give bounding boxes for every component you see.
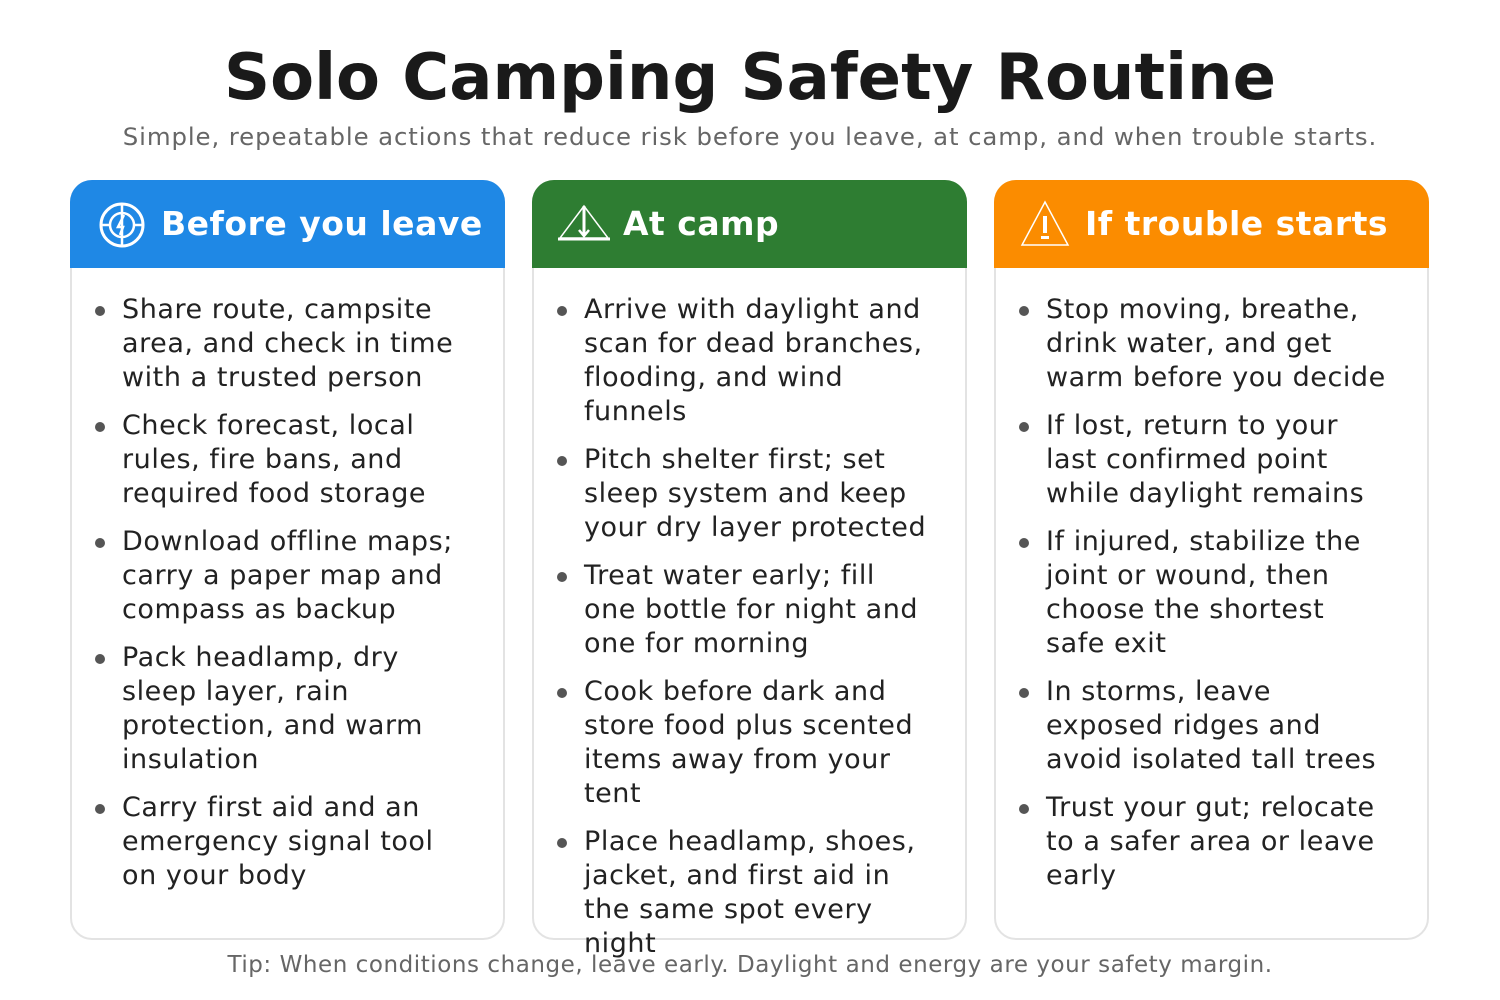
list: before you leave: required food storage [122,478,426,509]
list: before you leave: area, and check in time [122,328,453,359]
list: before you leave: protection, and warm [122,710,423,741]
list: before you leave: emergency signal tool [122,826,434,857]
list: at camp: store food plus scented [584,710,913,741]
tip footer: Tip: When conditions change, leave early. Daylight and energy are your safety margin. [227,952,1273,978]
list: if trouble starts: early [1046,860,1116,891]
panel: if trouble starts [994,180,1429,940]
list: at camp: Treat water early; fill [584,560,875,591]
list: at camp: one bottle for night and [584,594,918,625]
icon: warning [1020,200,1070,246]
list: before you leave: carry a paper map and [122,560,443,591]
list: before you leave: insulation [122,744,259,775]
list: if trouble starts: joint or wound, then [1046,560,1330,591]
list: at camp: jacket, and first aid in [584,860,890,891]
list: if trouble starts: exposed ridges and [1046,710,1321,741]
title: Solo Camping Safety Routine [224,41,1276,115]
list: if trouble starts: while daylight remains [1046,478,1364,509]
list: at camp: sleep system and keep [584,478,907,509]
list: before you leave: rules, fire bans, and [122,444,403,475]
list: if trouble starts: to a safer area or leave [1046,826,1375,857]
list: before you leave: sleep layer, rain [122,676,349,707]
list: at camp: the same spot every [584,894,873,925]
list: if trouble starts: If injured, stabilize the [1046,526,1361,557]
list: at camp [557,294,926,959]
header: before you leave [70,180,505,268]
list: if trouble starts: safe exit [1046,628,1166,659]
list: before you leave: Carry first aid and an [122,792,420,823]
list: before you leave: Share route, campsite [122,294,432,325]
list: at camp: items away from your [584,744,891,775]
list: at camp: scan for dead branches, [584,328,923,359]
list: at camp: Arrive with daylight and [584,294,921,325]
list: at camp: funnels [584,396,687,427]
list: at camp: Pitch shelter first; set [584,444,885,475]
list: if trouble starts: drink water, and get [1046,328,1332,359]
list: at camp: night [584,928,656,959]
list: if trouble starts: last confirmed point [1046,444,1328,475]
list: at camp: tent [584,778,641,809]
list: before you leave: compass as backup [122,594,396,625]
list: if trouble starts: warm before you decide [1046,362,1386,393]
subtitle: Simple, repeatable actions that reduce risk before you leave, at camp, and when trouble starts. [123,122,1377,151]
icon: compass [100,202,144,248]
icon: tent [558,204,610,240]
list: at camp: your dry layer protected [584,512,926,543]
header: before you leave: Before you leave [161,204,483,243]
list: if trouble starts: avoid isolated tall trees [1046,744,1376,775]
list: before you leave: Pack headlamp, dry [122,642,399,673]
panel: at camp [532,180,967,940]
header: if trouble starts [994,180,1429,268]
list: at camp: flooding, and wind [584,362,843,393]
list: before you leave: on your body [122,860,307,891]
header: at camp: At camp [623,204,779,243]
header: at camp [532,180,967,268]
list: before you leave: with a trusted person [122,362,423,393]
list: if trouble starts: choose the shortest [1046,594,1324,625]
list: at camp: Place headlamp, shoes, [584,826,916,857]
list: before you leave: Download offline maps; [122,526,453,557]
list: if trouble starts: If lost, return to your [1046,410,1338,441]
header: if trouble starts: If trouble starts [1085,204,1388,243]
panel: before you leave [70,180,505,940]
list: at camp: Cook before dark and [584,676,886,707]
list: before you leave: Check forecast, local [122,410,414,441]
list: if trouble starts: In storms, leave [1046,676,1271,707]
list: at camp: one for morning [584,628,809,659]
list: if trouble starts: Trust your gut; relocate [1046,792,1375,823]
list: if trouble starts [1019,294,1386,891]
list: if trouble starts: Stop moving, breathe, [1046,294,1359,325]
list: before you leave [95,294,453,891]
